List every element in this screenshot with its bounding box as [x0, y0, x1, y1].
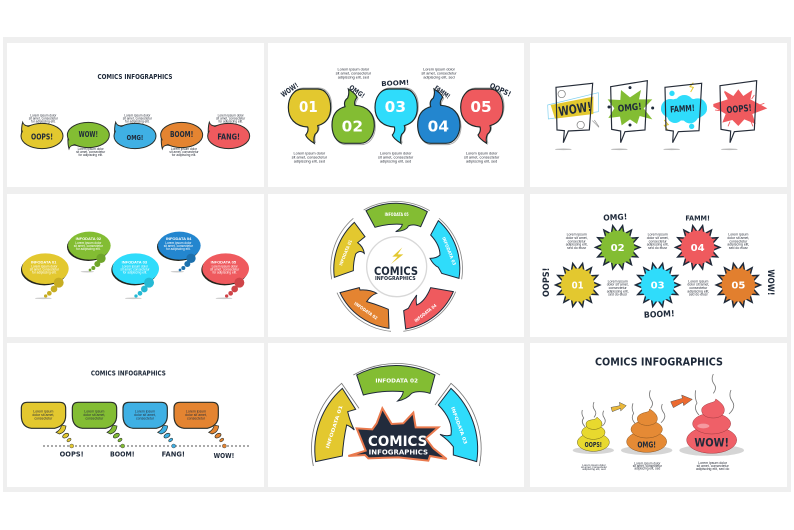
text block bottom 3: sit amet, consectetur: [464, 156, 500, 160]
step BOOM!: Lorem ipsum: [84, 410, 104, 414]
text block top left: sit amet, consectetur: [336, 72, 372, 76]
text block bottom 1: Lorem ipsum dolor: [293, 152, 325, 156]
text block bottom 1: adipiscing elit, sed: [294, 160, 325, 164]
bubble 05: 05: [470, 99, 492, 116]
bubble: WOW!: [67, 122, 109, 149]
text block OOPS!: Lorem ipsum dolor: [582, 463, 606, 467]
text block B: dolor sit amet,: [647, 236, 669, 240]
bubble INFODATA 05: sit amet, consectetur: [210, 268, 239, 272]
bubble INFODATA 03: for adipiscing elit.: [123, 271, 147, 275]
dotted timeline: [43, 444, 249, 448]
text block 1: sit amet, consectetur: [29, 117, 58, 121]
text block B: Lorem ipsum: [648, 233, 668, 237]
arrow: yellow: [312, 383, 359, 466]
step FANG!: FANG!: [162, 451, 185, 459]
bubble 02: [332, 89, 375, 145]
text block D: dolor sit amet,: [607, 283, 629, 287]
bubble INFODATA 01: for adipiscing elit.: [32, 271, 57, 275]
text block D: consectetur: [609, 286, 628, 290]
text block top right: adipiscing elit, sed: [423, 76, 455, 80]
pile: OOPS!: [573, 402, 614, 454]
bubble: OOPS!: [21, 122, 63, 149]
text block OMG!: adipiscing elit, sed: [634, 467, 660, 471]
bubble: OMG!: [114, 122, 156, 149]
center burst logo: INFOGRAPHICS: [369, 448, 428, 457]
text block 4: for adipiscing elit.: [172, 153, 196, 157]
text block bottom 2: Lorem ipsum dolor: [380, 152, 412, 156]
text block 1: for adipiscing elit.: [31, 120, 56, 124]
text block B: consectetur: [649, 239, 668, 243]
panel: growing piles: [530, 343, 787, 487]
text block WOW!: sit amet, consectetur: [697, 464, 730, 468]
step FANG!: consectetur: [136, 416, 155, 420]
panel: circular cycle: [268, 194, 524, 337]
burst 05: [714, 262, 762, 308]
step WOW!: consectetur: [187, 416, 206, 420]
burst 04: [674, 224, 722, 271]
step OOPS!: dolor sit amet,: [32, 413, 54, 417]
label OOPS!: OOPS!: [488, 81, 513, 99]
text block 5: sit amet, consectetur: [216, 117, 245, 121]
arrow: green top: INFODATA 05: [385, 212, 409, 218]
text block B: sed do eiusr: [648, 246, 668, 250]
bubble INFODATA 01: INFODATA 01: [31, 260, 57, 265]
bubble INFODATA 03: [111, 253, 159, 299]
label BOOM!: BOOM!: [644, 308, 675, 320]
panel: semicircle arrows: [268, 343, 524, 487]
step WOW!: WOW!: [214, 452, 234, 460]
label FAMM!: FAMM!: [685, 215, 710, 223]
bubble INFODATA 04: INFODATA 04: [166, 236, 192, 241]
bubble INFODATA 03: sit amet, consectetur: [120, 268, 150, 272]
burst 03: [634, 262, 682, 308]
text block A: consectetur: [568, 239, 587, 243]
arrow: green: INFODATA 02: [375, 379, 419, 385]
panel: numbered speech bubbles: [268, 43, 524, 187]
text block top left: Lorem ipsum dolor: [337, 68, 369, 72]
step BOOM!: dolor sit amet,: [83, 413, 105, 417]
text block bottom 2: sit amet, consectetur: [378, 156, 414, 160]
text block 3: Lorem ipsum dolor: [124, 114, 150, 118]
text block OOPS!: sit amet, consectetur: [581, 465, 607, 469]
bubble 05: [461, 88, 504, 143]
step OOPS!: OOPS!: [60, 451, 84, 459]
frame OOPS!: OOPS!: [726, 103, 752, 116]
text block OMG!: Lorem ipsum dolor: [634, 462, 660, 466]
frame FAMM!: [661, 83, 707, 150]
center circle: INFOGRAPHICS: [375, 276, 416, 282]
bubble: FANG!: FANG!: [217, 132, 240, 141]
panel: star bursts: [530, 194, 787, 337]
label WOW!: WOW!: [765, 269, 775, 295]
title: COMICS INFOGRAPHICS: [91, 370, 166, 378]
text block 2: for adipiscing elit.: [78, 153, 103, 157]
frame OMG!: [607, 81, 654, 150]
arrow: red lower right: INFODATA 04: [413, 303, 438, 324]
step OOPS!: [21, 402, 84, 459]
text block WOW!: Lorem ipsum dolor: [698, 461, 727, 465]
center burst logo: [348, 408, 447, 461]
bubble INFODATA 01: Lorem ipsum dolor: [31, 265, 57, 269]
text block top right: Lorem ipsum dolor: [423, 68, 455, 72]
label FAMM!: FAMM!: [433, 84, 452, 101]
bubble 03: [375, 88, 418, 143]
step BOOM!: consectetur: [85, 416, 104, 420]
arrow: yellow: INFODATA 01: [325, 405, 345, 449]
bubble INFODATA 02: Lorem ipsum dolor: [75, 241, 101, 245]
step BOOM!: [72, 402, 135, 459]
arrow: green: [353, 363, 440, 401]
bubble: BOOM!: BOOM!: [170, 130, 193, 139]
bubble 04: 04: [428, 119, 449, 136]
text block D: Lorem ipsum: [608, 279, 628, 283]
text block E: consectetur: [689, 286, 708, 290]
arrow: small orange-yellow: [611, 402, 626, 412]
arrow: large red-orange: [671, 395, 692, 408]
bubble INFODATA 05: Lorem ipsum dolor: [212, 265, 238, 269]
bubble INFODATA 01: sit amet, consectetur: [30, 268, 59, 272]
text block bottom 2: adipiscing elit, sed: [380, 160, 411, 164]
bubble INFODATA 02: sit amet, consectetur: [74, 244, 103, 248]
bubble 01: [288, 88, 332, 143]
text block 5: for adipiscing elit.: [218, 120, 243, 124]
text block E: adipiscing elit,: [687, 289, 709, 293]
text block 4: Lorem ipsum dolor: [171, 147, 197, 151]
arrow: yellow left: INFODATA 01: [338, 239, 354, 267]
bubble INFODATA 03: INFODATA 03: [122, 260, 148, 265]
bubble INFODATA 04: Lorem ipsum dolor: [165, 241, 191, 245]
frame WOW!: [548, 83, 599, 150]
title: COMICS INFOGRAPHICS: [97, 73, 173, 81]
bubble: OOPS!: OOPS!: [31, 132, 53, 141]
label WOW!: WOW!: [279, 81, 300, 99]
center circle: COMICS: [374, 264, 418, 278]
text block A: adipiscing elit,: [566, 243, 588, 247]
bubble INFODATA 04: sit amet, consectetur: [164, 244, 193, 248]
bubble: OMG!: OMG!: [127, 133, 143, 142]
step FANG!: dolor sit amet,: [134, 413, 156, 417]
bubble INFODATA 01: [21, 253, 69, 299]
bubble INFODATA 05: INFODATA 05: [211, 260, 237, 265]
arrow: cyan right: INFODATA 03: [440, 236, 457, 266]
text block 2: Lorem ipsum dolor: [78, 147, 104, 151]
step FANG!: Lorem ipsum: [135, 410, 155, 414]
text block 5: Lorem ipsum dolor: [218, 114, 244, 118]
bubble INFODATA 05: for adipiscing elit.: [212, 271, 237, 275]
bubble INFODATA 02: INFODATA 02: [76, 236, 102, 241]
panel: timeline: [7, 343, 264, 487]
text block A: dolor sit amet,: [566, 236, 588, 240]
bubble 03: 03: [385, 99, 406, 116]
label OMG!: OMG!: [347, 83, 366, 100]
text block E: dolor sit amet,: [687, 283, 709, 287]
bubble INFODATA 02: for adipiscing elit.: [76, 247, 101, 251]
bubble INFODATA 05: [201, 253, 249, 299]
bubble 04: [418, 89, 461, 145]
bubble INFODATA 04: for adipiscing elit.: [166, 247, 191, 251]
center circle: [367, 237, 427, 297]
step OOPS!: Lorem ipsum: [33, 410, 53, 414]
text block OOPS!: adipiscing elit, sed: [582, 467, 606, 471]
frame WOW!: WOW!: [557, 99, 593, 119]
text block bottom 3: adipiscing elit, sed: [466, 160, 497, 164]
burst 01: 01: [572, 281, 584, 292]
bubble: WOW!: WOW!: [79, 130, 98, 139]
panel: comic frames: [530, 43, 787, 187]
burst 01: [554, 262, 602, 308]
text block OMG!: sit amet, consectetur: [633, 464, 662, 468]
burst 04: 04: [691, 243, 705, 254]
panel: speech bubbles row: [7, 43, 264, 187]
text block C: Lorem ipsum: [728, 233, 748, 237]
step OOPS!: consectetur: [34, 416, 53, 420]
text block E: sed do eiusr: [689, 293, 709, 297]
bubble INFODATA 03: Lorem ipsum dolor: [122, 265, 148, 269]
panel: thought bubbles: [7, 194, 264, 337]
arrow: cyan: [435, 383, 481, 466]
text block D: sed do eiusr: [608, 293, 628, 297]
label BOOM!: BOOM!: [381, 79, 409, 88]
frame FAMM!: FAMM!: [670, 104, 695, 116]
pile: OMG!: OMG!: [637, 440, 656, 449]
text block C: sed do eiusr: [729, 246, 749, 250]
text block C: consectetur: [729, 239, 748, 243]
bubble 02: 02: [342, 119, 363, 136]
text block C: dolor sit amet,: [727, 236, 749, 240]
text block bottom 1: sit amet, consectetur: [292, 156, 328, 160]
text block WOW!: adipiscing elit, sed do: [696, 467, 729, 471]
burst 02: 02: [611, 243, 625, 254]
text block 3: for adipiscing elit.: [125, 120, 150, 124]
text block 3: sit amet, consectetur: [123, 117, 152, 121]
arrow: orange lower left: INFODATA 02: [353, 301, 378, 321]
bubble: FANG!: [208, 122, 250, 149]
text block bottom 3: Lorem ipsum dolor: [466, 152, 498, 156]
text block E: Lorem ipsum: [688, 279, 708, 283]
bubble: BOOM!: [161, 122, 203, 149]
bubble 01: 01: [299, 99, 318, 116]
pile: OOPS!: OOPS!: [585, 441, 602, 449]
center burst logo: COMICS: [368, 434, 427, 450]
label OMG!: OMG!: [603, 212, 627, 223]
pile: WOW!: [679, 374, 744, 456]
text block D: adipiscing elit,: [607, 289, 629, 293]
title: COMICS INFOGRAPHICS: [595, 356, 723, 369]
bubble INFODATA 02: [67, 232, 111, 272]
text block B: adipiscing elit,: [647, 243, 669, 247]
bubble INFODATA 04: [157, 232, 201, 272]
text block top right: sit amet, consectetur: [421, 72, 457, 76]
text block A: sed do eiusr: [567, 246, 587, 250]
arrow: cyan: INFODATA 03: [449, 406, 468, 445]
text block 1: Lorem ipsum dolor: [30, 114, 56, 118]
step WOW!: [174, 402, 234, 460]
burst 03: 03: [651, 281, 665, 292]
step BOOM!: BOOM!: [110, 451, 135, 459]
text block top left: adipiscing elit, sed: [338, 76, 369, 80]
pile: WOW!: WOW!: [694, 435, 729, 449]
pile: OMG!: [621, 390, 672, 455]
text block C: adipiscing elit,: [727, 243, 749, 247]
frame OOPS!: [713, 81, 767, 150]
label OOPS!: OOPS!: [542, 268, 552, 297]
text block 4: sit amet, consectetur: [169, 150, 199, 154]
text block 2: sit amet, consectetur: [76, 150, 105, 154]
burst 05: 05: [731, 281, 745, 292]
step WOW!: dolor sit amet,: [185, 413, 207, 417]
frame OMG!: OMG!: [617, 101, 642, 115]
burst 02: [594, 224, 642, 271]
text block A: Lorem ipsum: [567, 233, 587, 237]
step FANG!: [123, 402, 185, 459]
step WOW!: Lorem ipsum: [186, 410, 206, 414]
